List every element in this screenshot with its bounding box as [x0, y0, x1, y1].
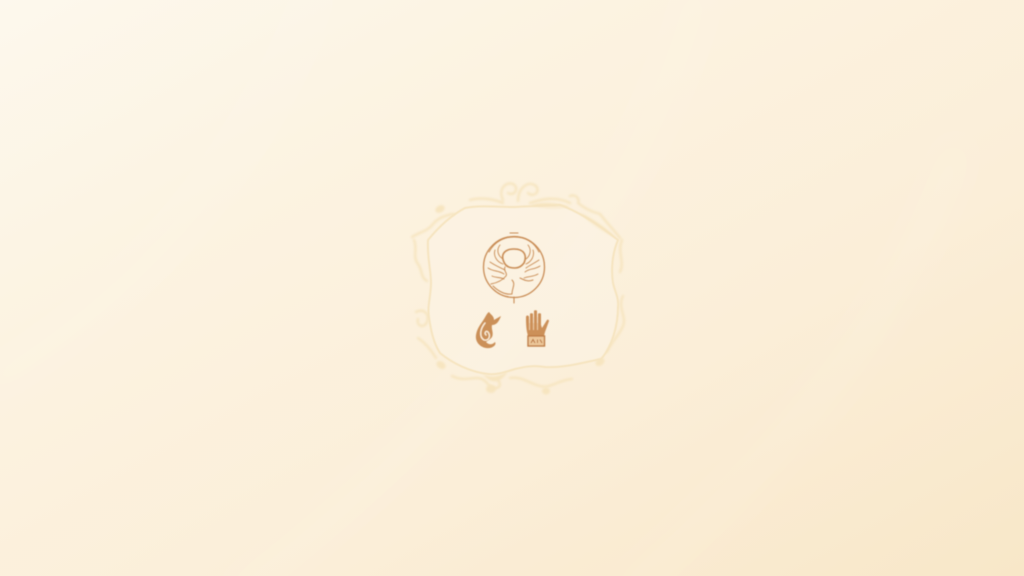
frame fill panel	[428, 205, 618, 374]
medallion central head	[503, 249, 525, 268]
medallion top and bottom ticks	[510, 233, 518, 303]
ornamental frame	[412, 183, 624, 394]
hand cuff	[528, 336, 544, 346]
icon: circular medallion	[484, 233, 544, 303]
icon: curled salamander	[476, 312, 501, 348]
hand fingers	[526, 310, 549, 336]
hand finger gaps	[530, 317, 538, 330]
medallion neck and body	[491, 267, 514, 294]
frame outline	[428, 205, 618, 374]
frame scrollwork	[412, 183, 624, 388]
medallion left wing lines	[488, 245, 505, 279]
frame ornament leaves	[434, 203, 616, 394]
icon: hand	[526, 310, 549, 346]
medallion rings	[484, 236, 544, 298]
medallion right wing lines	[524, 245, 540, 278]
